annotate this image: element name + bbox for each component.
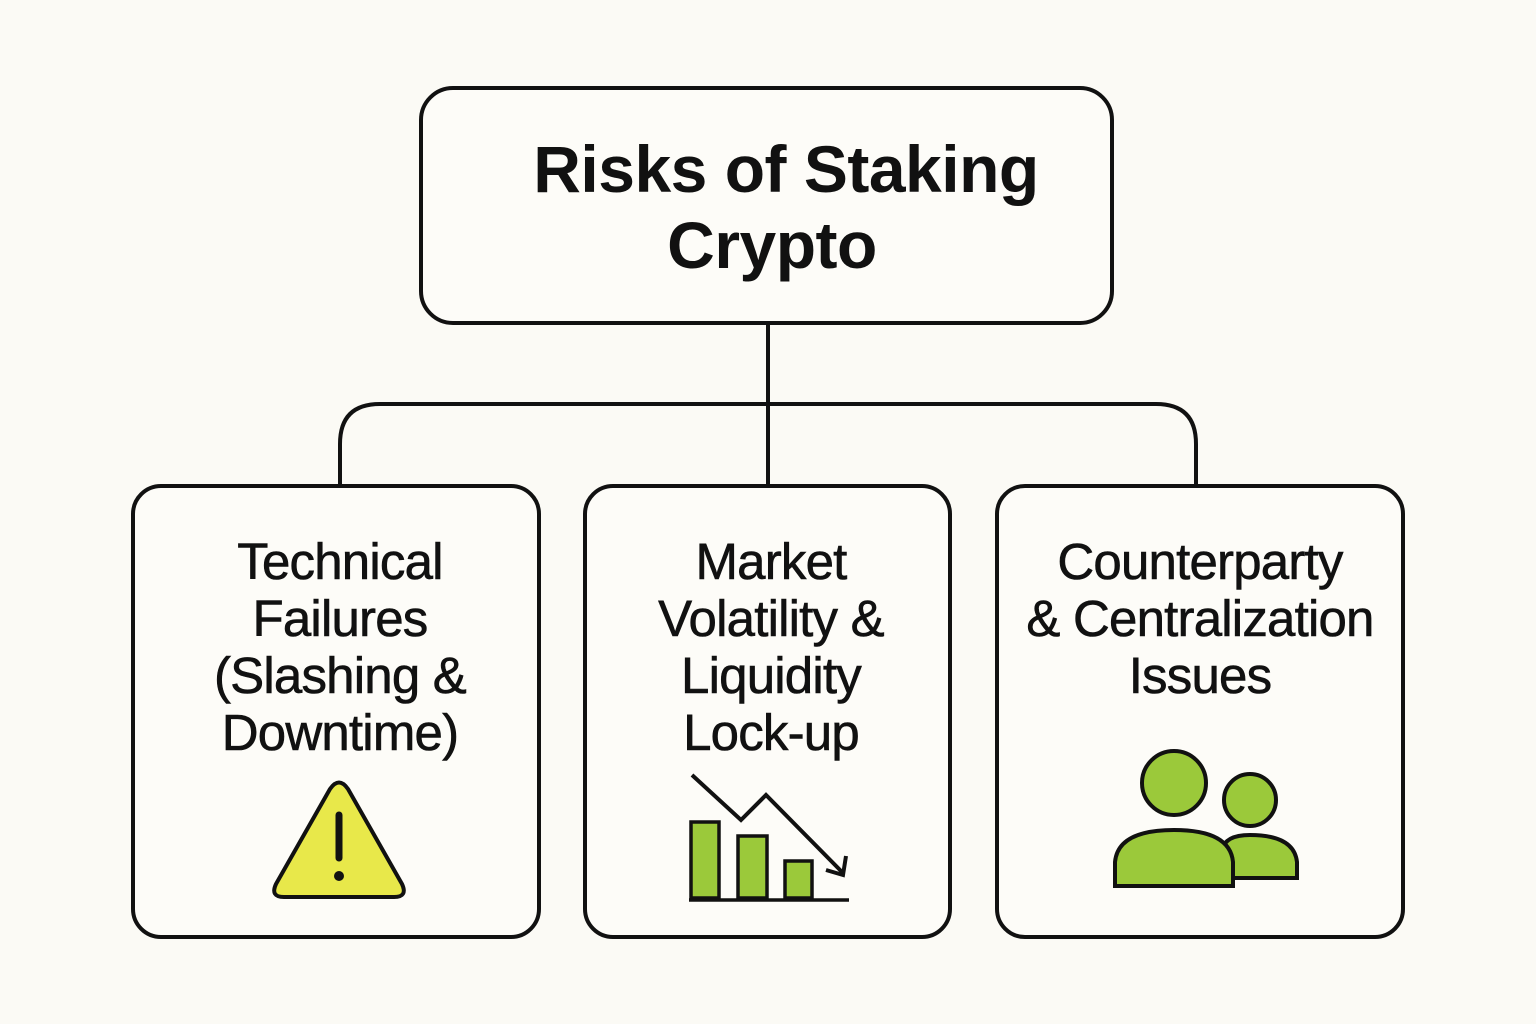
text: market volatility: Lock-up [683, 704, 859, 761]
text: technical failures: Downtime) [222, 704, 458, 761]
text: technical failures [214, 533, 466, 761]
text: counterparty: Counterparty [1057, 533, 1343, 590]
text: market volatility: Volatility & [658, 590, 884, 647]
text: market volatility [658, 533, 884, 761]
title box [421, 88, 1112, 323]
connector lines [340, 323, 1196, 486]
text: market volatility: Market [695, 533, 847, 590]
title: Crypto [667, 208, 877, 282]
panel box: market [585, 486, 950, 937]
text: market volatility: Liquidity [681, 647, 861, 704]
panel box: technical [133, 486, 539, 937]
panel box: counterparty [997, 486, 1403, 937]
text: counterparty: Issues [1129, 647, 1271, 704]
title: Risks of Staking [533, 132, 1039, 206]
icon: people [1115, 751, 1297, 886]
text: counterparty: & Centralization [1026, 590, 1374, 647]
text: technical failures: Failures [252, 590, 428, 647]
icon: warning triangle [274, 782, 404, 897]
text: technical failures: (Slashing & [214, 647, 466, 704]
title [533, 132, 1039, 282]
text: technical failures: Technical [237, 533, 443, 590]
text: counterparty [1026, 533, 1374, 704]
icon: falling bar chart [689, 775, 849, 900]
